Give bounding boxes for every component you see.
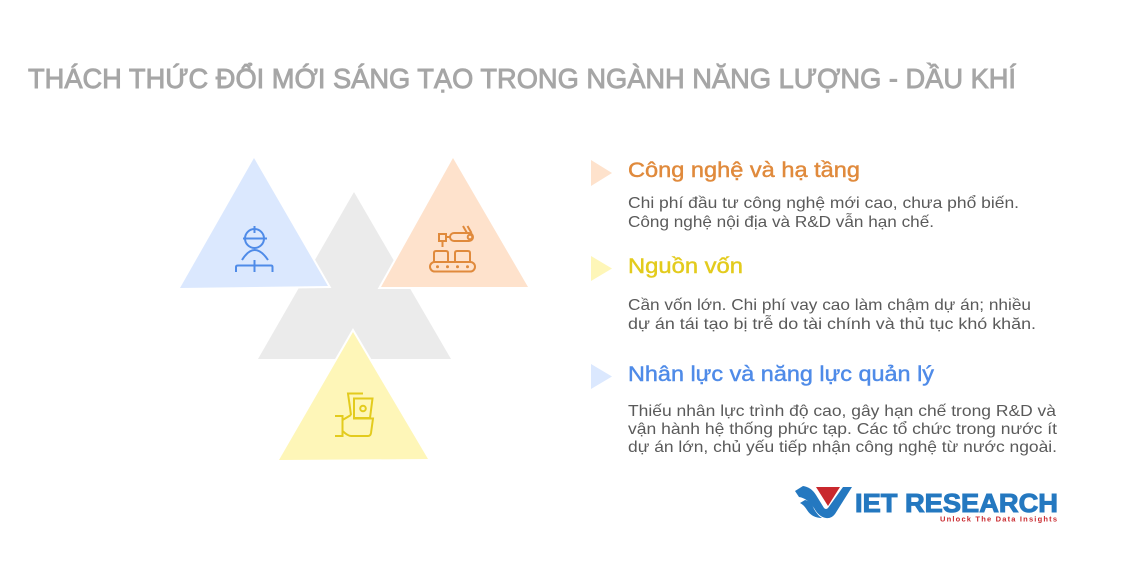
title: THÁCH THỨC ĐỔI MỚI SÁNG TẠO TRONG NGÀNH NĂNG LƯỢNG - DẦU KHÍ bbox=[28, 63, 1016, 94]
logo tagline: Unlock The Data Insights bbox=[940, 514, 1057, 524]
section: Nguồn vốn bbox=[591, 254, 1036, 333]
heading: Nguồn vốn: Nguồn vốn bbox=[628, 254, 743, 278]
text block: workforce description: vận hành hệ thống phức tạp. Các tổ chức trong nước ít bbox=[628, 420, 1058, 438]
text block: technology description: Công nghệ nội địa và R&D vẫn hạn chế. bbox=[628, 212, 934, 231]
icon: robot arm and conveyor bbox=[430, 226, 475, 272]
text block: capital description bbox=[628, 297, 1036, 333]
arrow: blue marker bbox=[591, 364, 612, 389]
text block: workforce description: dự án lớn, chủ yếu tiếp nhận công nghệ từ nước ngoài. bbox=[628, 439, 1057, 456]
text block: capital description: dự án tái tạo bị trễ do tài chính và thủ tục khó khăn. bbox=[628, 314, 1036, 333]
heading: Công nghệ và hạ tầng: Công nghệ và hạ tầng bbox=[628, 158, 860, 182]
panel: yellow triangle bbox=[279, 332, 428, 460]
text block: capital description: Cần vốn lớn. Chi phí vay cao làm chậm dự án; nhiều bbox=[628, 297, 1031, 314]
icon: hand holding money bbox=[335, 394, 373, 436]
triangle cluster diagram bbox=[180, 158, 528, 460]
icon: worker with hard hat bbox=[236, 226, 272, 272]
panel: orange triangle bbox=[381, 158, 528, 287]
heading: Nhân lực và năng lực quản lý: Nhân lực và năng lực quản lý bbox=[628, 362, 934, 386]
section: Nhân lực và năng lực quản lý bbox=[591, 362, 1058, 456]
arrow: orange marker bbox=[591, 160, 612, 186]
section: Công nghệ và hạ tầng bbox=[591, 158, 1019, 231]
arrow: yellow marker bbox=[591, 256, 612, 281]
text block: workforce description bbox=[628, 403, 1058, 456]
icon: logo mark bbox=[795, 486, 852, 518]
text block: technology description: Chi phí đầu tư công nghệ mới cao, chưa phổ biến. bbox=[628, 194, 1019, 212]
panel: blue triangle bbox=[180, 158, 328, 288]
logo: Viet Research bbox=[795, 486, 1058, 524]
text block: technology description bbox=[628, 194, 1019, 231]
text block: workforce description: Thiếu nhân lực trình độ cao, gây hạn chế trong R&D và bbox=[628, 403, 1056, 420]
panel: central grey triangle bbox=[258, 192, 451, 359]
logo wordmark: IET RESEARCH bbox=[855, 488, 1058, 518]
